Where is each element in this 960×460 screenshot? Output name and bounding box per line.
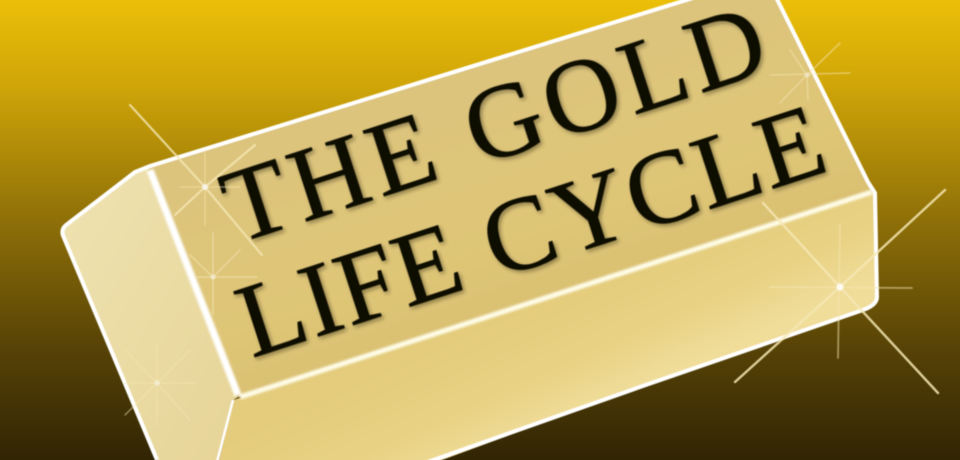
sparkle: left middle xyxy=(190,233,257,315)
bar left end face xyxy=(62,168,238,460)
title shadow: LIFE CYCLE xyxy=(225,82,840,382)
bar front face xyxy=(217,192,877,460)
sparkles xyxy=(125,43,945,425)
bar vertical edge xyxy=(217,400,233,460)
title text on bar xyxy=(208,0,840,382)
title line 2: LIFE CYCLE xyxy=(223,80,838,380)
sparkle: lower left xyxy=(125,345,195,425)
sparkle: upper left xyxy=(130,105,262,255)
sparkle: lower right xyxy=(735,190,945,393)
sparkle: upper right xyxy=(770,43,850,103)
bar top face xyxy=(148,0,872,397)
bar highlight edges xyxy=(150,170,872,397)
